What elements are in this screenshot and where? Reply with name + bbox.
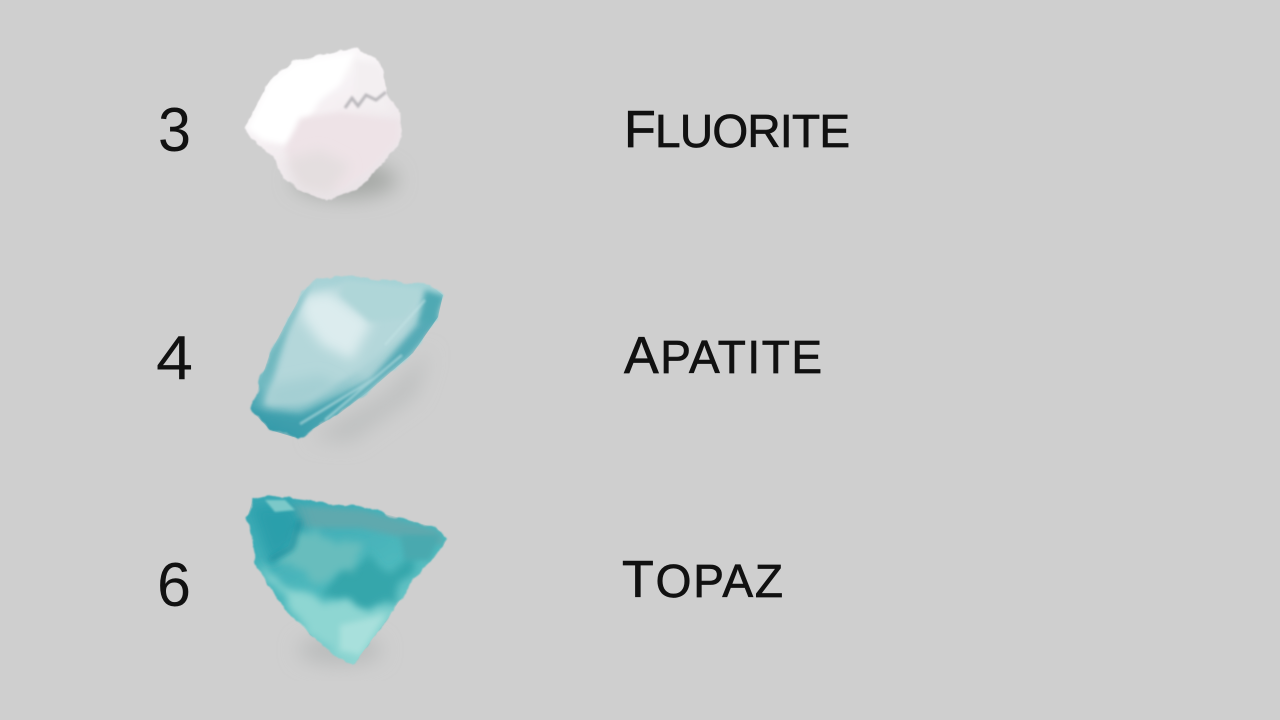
- row: apatite: [156, 275, 822, 442]
- label: Topaz: TOPAZ: [622, 551, 783, 609]
- row: fluorite: [158, 49, 850, 200]
- label: Fluorite: FLUORITE: [624, 101, 850, 159]
- icon: fluorite rock: [245, 49, 403, 200]
- label: Apatite: APATITE: [624, 327, 822, 385]
- number 6: 6: [157, 551, 191, 620]
- number 3: 3: [158, 96, 191, 165]
- icon: apatite crystal: [251, 275, 445, 442]
- number 4: 4: [156, 324, 193, 393]
- row: topaz: [157, 496, 783, 665]
- icon: topaz crystal: [247, 496, 447, 665]
